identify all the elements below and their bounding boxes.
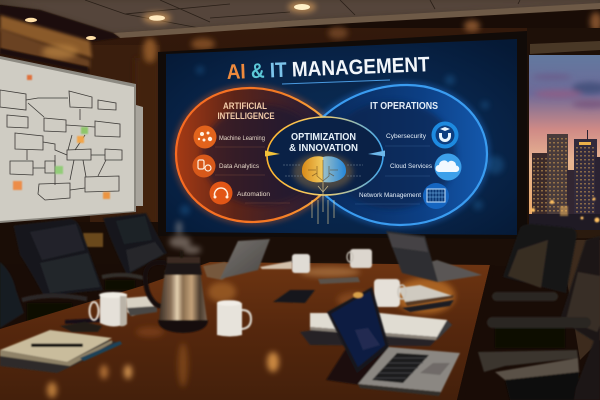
icon: brain bbox=[283, 154, 363, 224]
sticky notes bbox=[13, 75, 110, 199]
table bbox=[0, 262, 495, 400]
steam bbox=[169, 221, 201, 254]
label: cybersecurity: Cybersecurity bbox=[386, 133, 427, 140]
heading: it operations: IT OPERATIONS bbox=[370, 101, 438, 112]
arrow: from it bbox=[368, 150, 385, 156]
heading: optimization and innovation: & INNOVATION bbox=[289, 143, 358, 154]
icon: network management bbox=[423, 183, 449, 209]
phone and tablet bbox=[60, 277, 360, 332]
venn: artificial intelligence bbox=[176, 88, 323, 222]
title: AI & IT MANAGEMENT bbox=[226, 53, 430, 84]
table reflections bbox=[10, 267, 455, 398]
label: automation: Automation bbox=[237, 191, 271, 198]
heading: artificial intelligence: ARTIFICIAL bbox=[223, 101, 267, 112]
heading: artificial intelligence bbox=[218, 101, 274, 122]
arrow: from ai bbox=[265, 150, 280, 156]
whiteboard bbox=[0, 56, 143, 223]
kettle bbox=[145, 251, 208, 333]
front center mug bbox=[217, 300, 251, 336]
front left mug bbox=[90, 292, 127, 326]
mugs on far table bbox=[292, 249, 372, 273]
heading: optimization and innovation bbox=[289, 132, 358, 154]
venn: optimization and innovation overlap bbox=[265, 117, 385, 224]
small notebook and phone behind kettle bbox=[126, 296, 157, 316]
right papers and mug bbox=[374, 279, 454, 312]
front laptop bbox=[326, 287, 460, 396]
label: data analytics: Data Analytics bbox=[219, 163, 259, 170]
icon: automation bbox=[210, 182, 232, 204]
label: network management: Network Management bbox=[359, 192, 421, 199]
icon: machine learning bbox=[194, 126, 216, 148]
left chairs bbox=[0, 213, 167, 328]
label: cloud services: Cloud Services bbox=[390, 163, 432, 170]
far left laptop bbox=[203, 239, 292, 280]
heading: artificial intelligence: INTELLIGENCE bbox=[218, 111, 274, 122]
notebook stack bbox=[300, 313, 452, 346]
icon: cybersecurity bbox=[432, 122, 458, 148]
venn: it operations bbox=[323, 85, 487, 225]
whiteboard diagram bbox=[0, 90, 122, 200]
icon: data analytics bbox=[192, 154, 216, 178]
wall screen bbox=[158, 31, 527, 239]
right chairs bbox=[478, 224, 600, 400]
window with city skyline bbox=[527, 28, 600, 240]
ceiling with lights bbox=[0, 0, 600, 72]
far right laptop bbox=[386, 231, 482, 282]
notebook and pen bbox=[0, 330, 122, 373]
label: machine learning: Machine Learning bbox=[219, 135, 266, 142]
icon: cloud services bbox=[434, 154, 462, 180]
heading: optimization and innovation: OPTIMIZATION bbox=[291, 132, 356, 143]
